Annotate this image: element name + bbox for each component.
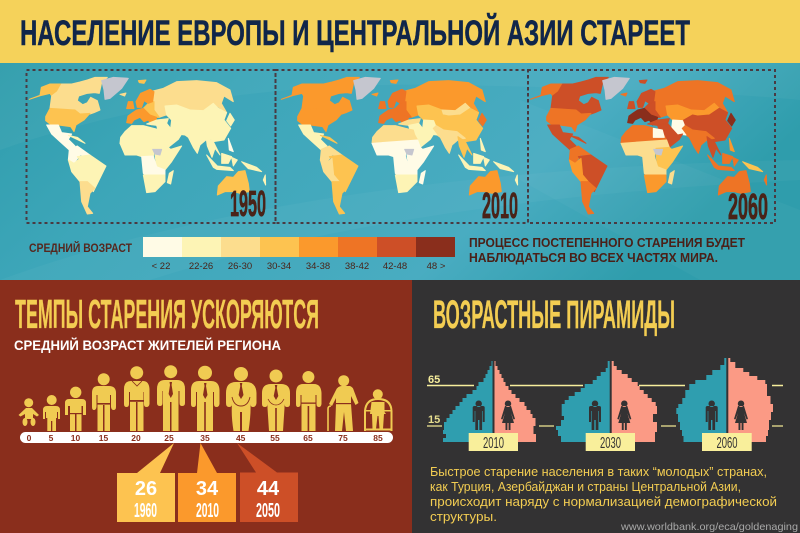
pyramid: 2060: 2060 [716,435,738,452]
text: ageing everywhere note: ПРОЦЕСС ПОСТЕПЕННОГО СТАРЕНИЯ БУДЕТ [469,235,745,250]
map: 1950 [29,77,266,214]
figure: 65 [296,371,322,431]
age ruler [20,432,393,443]
panel: world maps: 1950 [230,183,266,224]
figure: 85 in wheelchair [365,389,392,431]
legend: median age: 22-26 [189,261,213,272]
age lines 65 [427,384,783,386]
map frame: 2060 [528,70,775,223]
callout: 1960: 1960 [134,500,157,522]
age lines 15 [427,425,783,427]
callout: 2050: 2050 [256,500,280,522]
age label 65: 65 [428,374,440,386]
callout: 2050: 44 [257,478,280,500]
age ruler: 75 [338,433,348,443]
legend: median age: 42-48 [383,261,407,272]
callout: 2010: 2010 [196,500,219,522]
panel: age pyramids [412,280,800,533]
panel: pace of ageing [0,280,412,533]
age ruler: 0 [27,433,32,443]
age ruler: 55 [270,433,280,443]
legend: median age: 48 > [427,261,446,272]
legend: median age: < 22 [152,261,170,272]
figure: 5 [43,395,60,431]
figure: 75 with cane [328,375,358,431]
age ruler: 15 [99,433,108,443]
panel: pace of ageing: ТЕМПЫ СТАРЕНИЯ УСКОРЯЮТСЯ [15,291,319,337]
legend: median age: СРЕДНИЙ ВОЗРАСТ [29,242,132,255]
age ruler: 45 [236,433,246,443]
figure: 15 [92,373,116,431]
text: pyramid explanation: происходит наряду с нормализацией демографической [430,494,777,509]
age ruler: 35 [200,433,210,443]
callout: 1960: 26 [135,478,157,500]
figure: 45 [226,367,256,431]
text: pyramid explanation: как Турция, Азербайджан и страны Центральной Азии, [430,479,741,494]
age label 15: 15 [428,414,440,426]
legend: median age: 26-30 [228,261,252,272]
pyramid: 2010 [443,361,536,452]
pyramid: 2030 [556,361,657,452]
figure: 20 [124,366,150,431]
panel: world maps [0,63,800,280]
text: pyramid explanation: структуры. [430,509,497,524]
legend: median age: 34-38 [306,261,330,272]
title banner [0,0,800,63]
age ruler: 5 [49,433,54,443]
callout: 2010 [178,443,236,522]
map: 2010 [281,77,518,214]
age ruler: 25 [164,433,174,443]
callout: 2050 [237,443,298,522]
text: ageing everywhere note: НАБЛЮДАТЬСЯ ВО ВСЕХ ЧАСТЯХ МИРА. [469,250,718,265]
age figures row [18,365,392,431]
pyramid: 2030: 2030 [600,435,621,452]
map frame: 2010 [276,70,528,223]
figure: 10 [65,387,86,431]
legend: median age: 30-34 [267,261,291,272]
text: pyramid explanation [430,464,777,524]
callout: 2010: 34 [196,478,219,500]
text: ageing everywhere note [469,235,745,265]
map frame: 1950 [26,70,276,223]
age ruler: 20 [131,433,141,443]
subheading: СРЕДНИЙ ВОЗРАСТ ЖИТЕЛЕЙ РЕГИОНА [14,338,281,353]
figure: 35 [191,366,220,431]
age ruler: 65 [303,433,313,443]
map: 2060 [530,77,767,214]
legend: median age: 38-42 [345,261,369,272]
figure: 25 [157,365,185,431]
text: pyramid explanation: Быстрое старение населения в таких “молодых” странах, [430,464,767,479]
legend: median age [29,237,455,272]
age ruler: 10 [71,433,80,443]
pyramid: 2010: 2010 [483,435,504,452]
figure: baby [18,398,39,426]
figure: 55 [262,370,290,431]
panel: world maps: 2010 [482,185,518,226]
source url: www.worldbank.org/eca/goldenaging [620,521,798,533]
pyramid: 2060 [676,358,773,452]
callout: 1960 [117,443,175,522]
age ruler: 85 [373,433,383,443]
